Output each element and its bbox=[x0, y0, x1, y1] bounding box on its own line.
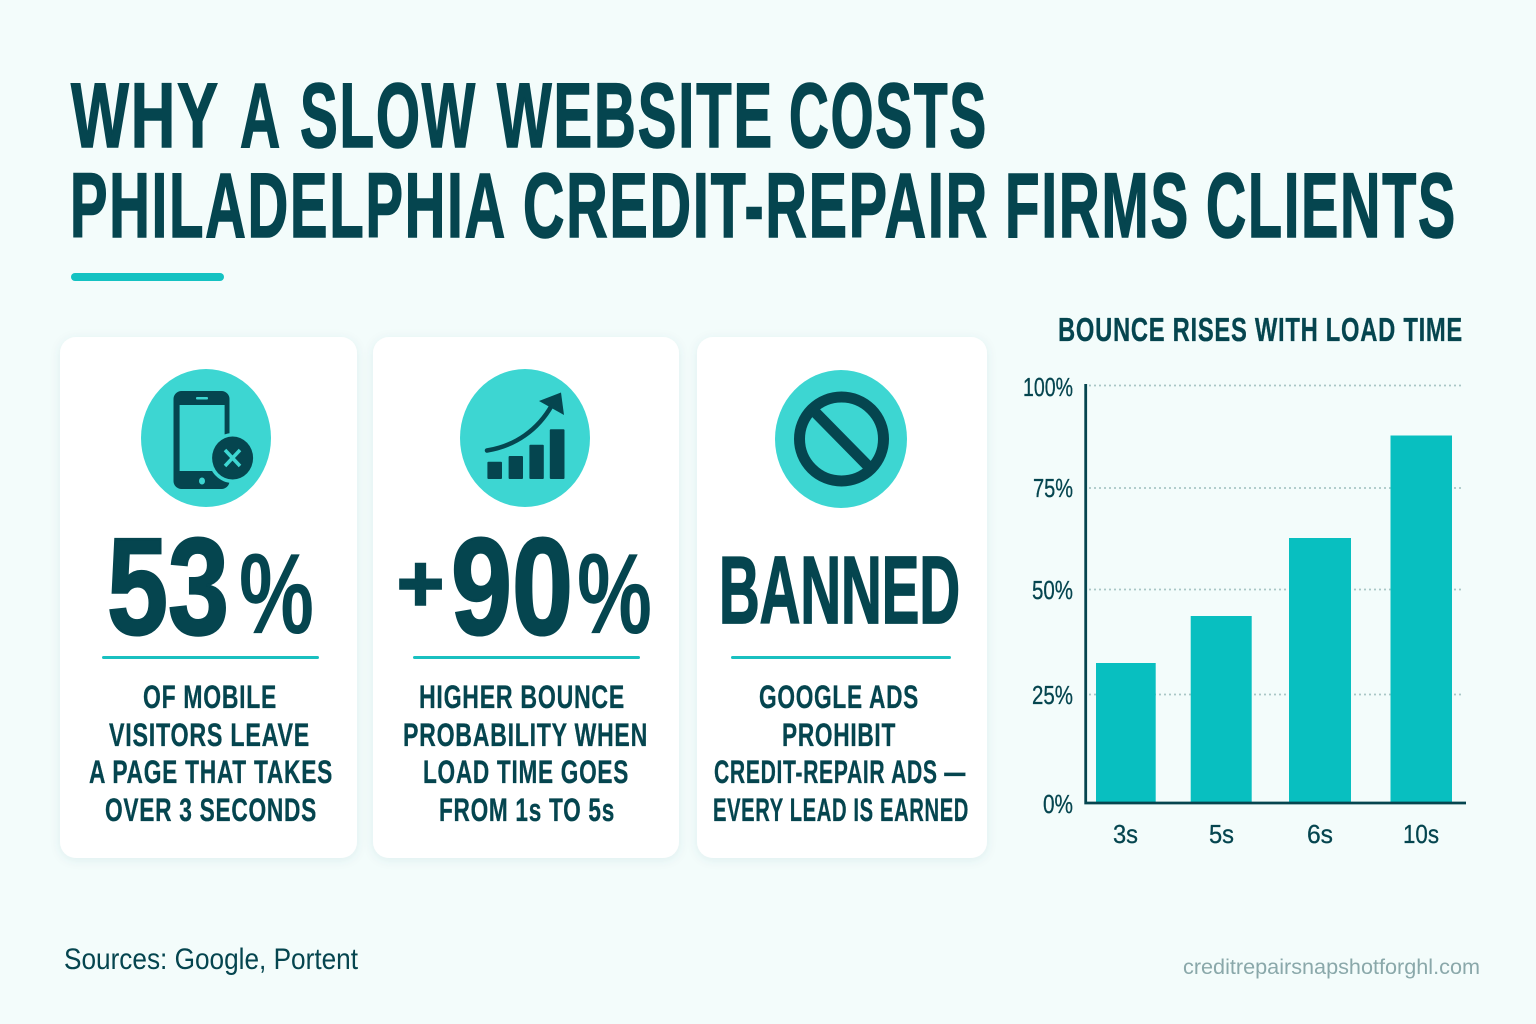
bar chart: bounce by load time bbox=[1023, 372, 1466, 849]
description: bounce probability: LOAD TIME GOES bbox=[423, 754, 629, 790]
x axis labels bbox=[1113, 819, 1439, 849]
x axis labels: 6s bbox=[1307, 819, 1333, 849]
sources: Sources: Google, Portent bbox=[64, 943, 359, 976]
y axis labels: 25% bbox=[1032, 680, 1073, 710]
y axis labels: 0% bbox=[1043, 789, 1073, 819]
description: google ads: PROHIBIT bbox=[782, 717, 896, 753]
x axis labels: 5s bbox=[1209, 819, 1234, 849]
title: COSTS bbox=[789, 65, 988, 167]
y axis labels: 75% bbox=[1033, 473, 1073, 503]
stat: +90%: + bbox=[397, 539, 444, 628]
title bbox=[70, 65, 1457, 257]
stat: +90%: % bbox=[577, 531, 652, 658]
description: bounce probability: HIGHER BOUNCE bbox=[419, 679, 625, 715]
description: bounce probability: FROM 1s TO 5s bbox=[439, 792, 615, 828]
description: mobile visitors: OF MOBILE bbox=[143, 679, 277, 715]
description: google ads: GOOGLE ADS bbox=[759, 679, 919, 715]
description: google ads: EVERY LEAD IS EARNED bbox=[713, 792, 969, 828]
bars bbox=[1096, 436, 1452, 802]
y axis labels bbox=[1023, 372, 1073, 819]
axes bbox=[1086, 384, 1466, 803]
stat: +90% bbox=[397, 510, 652, 664]
title: PHILADELPHIA bbox=[70, 155, 507, 257]
title: WEBSITE bbox=[497, 65, 774, 167]
icon: prohibited sign bbox=[775, 370, 907, 508]
panel: plus 90 percent bbox=[373, 337, 679, 858]
icon: rising bars with arrow bbox=[460, 369, 590, 507]
x axis labels: 3s bbox=[1113, 819, 1138, 849]
description: mobile visitors: OVER 3 SECONDS bbox=[105, 792, 317, 828]
title: WHY bbox=[71, 65, 220, 167]
description: mobile visitors: A PAGE THAT TAKES bbox=[89, 754, 333, 790]
stat: 53%: 53 bbox=[107, 510, 229, 664]
x axis labels: 10s bbox=[1403, 819, 1439, 849]
title accent underline bbox=[71, 273, 224, 281]
y axis labels: 100% bbox=[1023, 372, 1073, 402]
icon: phone with x bbox=[141, 369, 271, 507]
description: bounce probability: PROBABILITY WHEN bbox=[403, 717, 648, 753]
title: FIRMS bbox=[1005, 155, 1190, 257]
website url: creditrepairsnapshotforghl.com bbox=[1183, 956, 1480, 979]
description: bounce probability bbox=[403, 679, 648, 828]
description: mobile visitors: VISITORS LEAVE bbox=[109, 717, 310, 753]
stat: +90%: 90 bbox=[451, 510, 573, 664]
description: google ads: CREDIT-REPAIR ADS — bbox=[714, 754, 966, 790]
title: SLOW bbox=[300, 65, 477, 167]
panel: 53 percent bbox=[60, 337, 357, 858]
title: CREDIT-REPAIR bbox=[523, 155, 989, 257]
panel: banned bbox=[697, 337, 987, 858]
y axis labels: 50% bbox=[1032, 575, 1073, 605]
description: google ads bbox=[713, 679, 969, 828]
description: mobile visitors bbox=[89, 679, 333, 828]
stat: banned: BANNED bbox=[719, 537, 960, 644]
stat: 53%: % bbox=[239, 531, 314, 658]
title: A bbox=[240, 65, 282, 167]
